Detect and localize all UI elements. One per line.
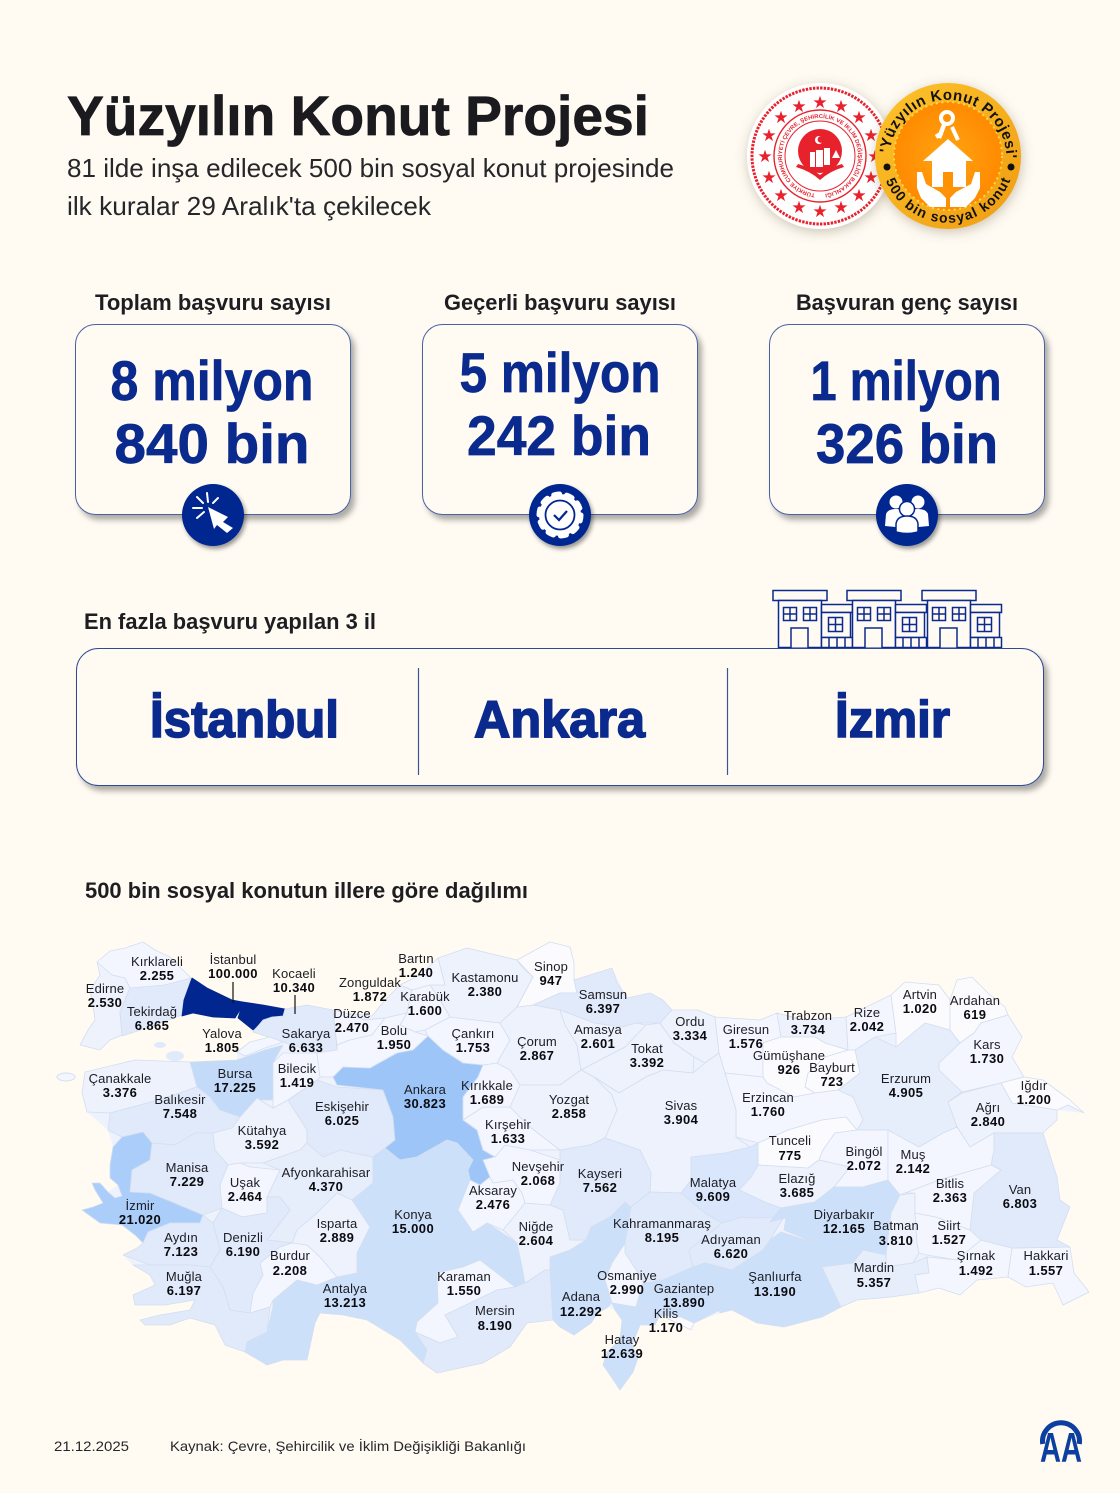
label: Diyarbakır: Diyarbakır [814,1207,874,1222]
label: Iğdır: Iğdır [1021,1078,1047,1093]
label: Amasya: Amasya [574,1022,622,1037]
label: Osmaniye: Osmaniye [597,1268,657,1283]
label: Antalya: 13.213 [324,1295,366,1310]
label: Diyarbakır: 12.165 [823,1221,865,1236]
label: Bitlis: 2.363 [933,1190,967,1205]
label: Kütahya: Kütahya [238,1123,286,1138]
province: Istanbul: İstanbul [150,691,339,749]
label: Kastamonu: 2.380 [468,984,502,999]
value: 1 milyon [810,349,1002,412]
label: Isparta: Isparta [317,1216,357,1231]
value [460,341,660,467]
label: Tokat: Tokat [631,1041,663,1056]
label: Bilecik: Bilecik [278,1061,316,1076]
label: Muş: 2.142 [896,1161,930,1176]
label: Kütahya: 3.592 [245,1137,279,1152]
label: Hatay: Hatay [605,1332,639,1347]
label: Bingöl: Bingöl [845,1144,883,1159]
icon: ministry seal: ★ [773,186,789,205]
label: Denizli: 6.190 [226,1244,260,1259]
label: Aydın: 7.123 [164,1244,198,1259]
label: Çorum: Çorum [517,1034,557,1049]
heading: Başvuran genç sayısı [796,290,1018,315]
label: Gümüşhane: Gümüşhane [753,1048,825,1063]
label: Osmaniye: 2.990 [610,1282,644,1297]
label: Kırklareli: Kırklareli [131,954,183,969]
label: Malatya: Malatya [690,1175,736,1190]
label: Siirt: 1.527 [932,1232,966,1247]
label: Mersin: 8.190 [478,1318,512,1333]
label: Şanlıurfa: Şanlıurfa [748,1269,802,1284]
footer date: 21.12.2025 [54,1438,129,1454]
label: Gaziantep: Gaziantep [654,1281,714,1296]
label: Artvin: Artvin [903,987,937,1002]
label: Edirne: Edirne [86,981,124,996]
panel: total applications [76,290,350,546]
province: Izmir: İzmir [835,691,950,749]
value: 8 milyon [110,349,314,412]
label: Adıyaman: 6.620 [714,1246,748,1261]
label: Batman: 3.810 [879,1233,913,1248]
label: Bolu: Bolu [381,1023,407,1038]
label: Ordu: Ordu [675,1014,705,1029]
label: Niğde: 2.604 [519,1233,554,1248]
label: Mardin: 5.357 [857,1275,891,1290]
label: Erzincan: Erzincan [742,1090,794,1105]
label: Iğdır: 1.200 [1017,1092,1051,1107]
label: Uşak: 2.464 [228,1189,263,1204]
label: Bayburt: 723 [821,1074,843,1089]
value [110,349,314,475]
label: Bilecik: 1.419 [280,1075,314,1090]
heading: map: 500 bin sosyal konutun illere göre dağılımı [85,878,528,903]
label: Van: Van [1009,1182,1031,1197]
label: Manisa: Manisa [166,1160,208,1175]
label: Ankara: 30.823 [404,1096,446,1111]
label: Kırklareli: 2.255 [140,968,174,983]
label: Aydın: Aydın [164,1230,198,1245]
label: Yalova: 1.805 [205,1040,239,1055]
subtitle: 81 ilde inşa edilecek 500 bin sosyal konut projesinde [67,153,674,183]
label: Uşak: Uşak [230,1175,260,1190]
icon: project badge [868,78,1030,240]
label: Karabük: Karabük [400,989,450,1004]
label: Ağrı: Ağrı [976,1100,1000,1115]
label: Karaman: Karaman [437,1269,491,1284]
label: Şırnak: Şırnak [957,1248,995,1263]
label: Erzurum: 4.905 [889,1085,923,1100]
label: Şanlıurfa: 13.190 [754,1284,796,1299]
icon: hands [917,172,980,207]
value: 242 bin [467,404,651,467]
label: Erzincan: 1.760 [751,1104,785,1119]
icon: ministry seal: ★ [867,147,883,166]
icon: key [936,112,958,140]
card [76,324,350,514]
label: Bingöl: 2.072 [847,1158,881,1173]
label: Batman: Batman [873,1218,919,1233]
label: Kayseri: Kayseri [578,1166,622,1181]
label: Şırnak: 1.492 [959,1263,993,1278]
title: Yüzyılın Konut Projesi [67,84,649,147]
label: Ardahan: 619 [964,1007,986,1022]
footer source: Kaynak: Çevre, Şehircilik ve İklim Değişikliği Bakanlığı [170,1437,526,1454]
label: Isparta: 2.889 [320,1230,354,1245]
icon: ministry seal: ★ [761,126,777,145]
label: Çanakkale: 3.376 [103,1085,137,1100]
icon: ministry seal: ★ [757,147,773,166]
label: Manisa: 7.229 [170,1174,204,1189]
map leader lines [233,982,295,1014]
label: Kırıkkale: Kırıkkale [461,1078,513,1093]
icon: ministry seal: ★ [791,198,807,217]
label: Afyonkarahisar: 4.370 [309,1179,343,1194]
label: Bursa: Bursa [218,1066,252,1081]
heading: top 3 provinces: En fazla başvuru yapılan 3 il [84,609,376,634]
label: Düzce: Düzce [333,1006,371,1021]
map labels [86,951,1069,1361]
label: Tekirdağ: Tekirdağ [127,1004,177,1019]
label: Eskişehir: 6.025 [325,1113,359,1128]
label: Ankara: Ankara [404,1082,446,1097]
label: Muş: Muş [900,1147,926,1162]
label: Giresun: 1.576 [729,1036,763,1051]
label: Gümüşhane: 926 [778,1062,800,1077]
label: Adıyaman: Adıyaman [701,1232,761,1247]
label: Sivas: Sivas [665,1098,697,1113]
icon: verified badge [529,484,591,546]
label: Siirt: Siirt [937,1218,961,1233]
label: Kastamonu: Kastamonu [451,970,519,985]
label: Samsun: Samsun [579,987,627,1002]
label: Sakarya: 6.633 [289,1040,323,1055]
label: Yozgat: Yozgat [549,1092,589,1107]
label: İstanbul: İstanbul [210,952,256,967]
label: Nevşehir: 2.068 [521,1173,555,1188]
label: İzmir: 21.020 [119,1212,161,1227]
label: Eskişehir: Eskişehir [315,1099,369,1114]
label: Antalya: Antalya [323,1281,367,1296]
label: Mersin: Mersin [475,1303,515,1318]
label: Muğla: 6.197 [167,1283,201,1298]
label: Hakkari: 1.557 [1029,1263,1063,1278]
label: Mardin: Mardin [854,1260,894,1275]
label: Zonguldak: 1.872 [353,989,387,1004]
label: Kayseri: 7.562 [583,1180,617,1195]
label: Kocaeli: Kocaeli [272,966,316,981]
icon: ministry seal: ★ [851,108,867,127]
icon: house [923,139,973,187]
panel: young applicants [770,290,1044,546]
label: Bolu: 1.950 [377,1037,411,1052]
icon: ministry seal: ★ [833,198,849,217]
value: 326 bin [816,412,998,475]
label: Bartın: 1.240 [399,965,433,980]
label: Bitlis: Bitlis [936,1176,964,1191]
label: Karabük: 1.600 [408,1003,442,1018]
label: Tekirdağ: 6.865 [135,1018,169,1033]
label: Kocaeli: 10.340 [273,980,315,995]
icon: ministry seal: ★ [812,93,828,112]
label: Amasya: 2.601 [581,1036,615,1051]
label: Çankırı: Çankırı [452,1026,494,1041]
label: Hatay: 12.639 [601,1346,643,1361]
icon: AA logo [1040,1423,1082,1471]
label: Rize: Rize [854,1005,880,1020]
label: Kilis: Kilis [654,1306,678,1321]
label: Kahramanmaraş: Kahramanmaraş [613,1216,711,1231]
label: Adana: Adana [562,1289,600,1304]
icon: ministry seal [740,78,890,240]
icon: project badge: 500 bin sosyal konut [886,177,1010,225]
label: Sinop: Sinop [534,959,568,974]
label: Yozgat: 2.858 [552,1106,586,1121]
label: Konya: Konya [394,1207,432,1222]
label: Sinop: 947 [540,973,562,988]
label: Afyonkarahisar: Afyonkarahisar [282,1165,370,1180]
label: Tunceli: 775 [779,1148,801,1163]
icon: buildings [773,590,1002,648]
label: Bayburt: Bayburt [809,1060,855,1075]
label: Niğde: Niğde [519,1219,553,1234]
value: 840 bin [114,412,310,475]
label: Kırıkkale: 1.689 [470,1092,504,1107]
map of provinces [57,942,1089,1390]
label: Erzurum: Erzurum [881,1071,931,1086]
label: Samsun: 6.397 [586,1001,620,1016]
label: Ağrı: 2.840 [971,1114,1005,1129]
label: Kilis: 1.170 [649,1320,683,1335]
label: Konya: 15.000 [392,1221,434,1236]
label: Giresun: Giresun [723,1022,769,1037]
value: 5 milyon [460,341,660,404]
label: Van: 6.803 [1003,1196,1037,1211]
heading: Toplam başvuru sayısı [95,290,331,315]
heading: Geçerli başvuru sayısı [444,290,676,315]
icon: people [876,484,938,546]
label: Ordu: 3.334 [673,1028,708,1043]
icon: project badge: 'Yüzyılın Konut Projesi' [880,90,1018,158]
label: Burdur: Burdur [270,1248,310,1263]
label: Tokat: 3.392 [630,1055,664,1070]
label: Kahramanmaraş: 8.195 [645,1230,679,1245]
card [422,324,698,514]
label: Sivas: 3.904 [664,1112,699,1127]
label: Bursa: 17.225 [214,1080,256,1095]
icon: ministry seal: ★ [863,168,879,187]
label: Nevşehir: Nevşehir [512,1159,564,1174]
label: Kars: Kars [973,1037,1001,1052]
label: Aksaray: Aksaray [469,1183,517,1198]
label: Sakarya: Sakarya [282,1026,330,1041]
label: Hakkari: Hakkari [1023,1248,1069,1263]
label: Burdur: 2.208 [273,1263,307,1278]
label: Artvin: 1.020 [903,1001,937,1016]
label: Rize: 2.042 [850,1019,884,1034]
label: Elazığ: 3.685 [780,1185,814,1200]
label: Çorum: 2.867 [520,1048,554,1063]
label: İzmir: İzmir [126,1198,154,1213]
label: Zonguldak: Zonguldak [339,975,401,990]
icon: ministry seal: ★ [773,108,789,127]
label: Çankırı: 1.753 [456,1040,490,1055]
label: Edirne: 2.530 [88,995,122,1010]
province: Ankara: Ankara [474,691,646,749]
label: Kars: 1.730 [970,1051,1004,1066]
label: Kırşehir: 1.633 [491,1131,525,1146]
label: Denizli: Denizli [223,1230,263,1245]
icon: ministry seal: ★ [812,202,828,221]
label: Gaziantep: 13.890 [663,1295,705,1310]
label: Yalova: Yalova [202,1026,242,1041]
label: Aksaray: 2.476 [476,1197,510,1212]
label: Balıkesir: Balıkesir [154,1092,206,1107]
label: Ardahan: Ardahan [950,993,1000,1008]
label: Elazığ: Elazığ [778,1171,816,1186]
subtitle: ilk kuralar 29 Aralık'ta çekilecek [67,191,432,221]
label: Düzce: 2.470 [335,1020,369,1035]
label: İstanbul: 100.000 [208,966,258,981]
icon: ministry seal: TÜRKİYE CUMHURİYETİ ÇEVRE, ŞEHİRCİLİK VE İKLİM DEĞİŞİKLİĞİ BAKANLIĞI [777,113,863,198]
label: Muğla: Muğla [166,1269,202,1284]
icon: ministry seal: ★ [791,97,807,116]
label: Çanakkale: Çanakkale [89,1071,151,1086]
label: Bartın: Bartın [398,951,434,966]
label: Karaman: 1.550 [447,1283,481,1298]
label: Balıkesir: 7.548 [163,1106,197,1121]
icon: ministry seal: ★ [863,126,879,145]
icon: AA logo: AA [1040,1424,1082,1471]
label: Trabzon: 3.734 [791,1022,826,1037]
value [810,349,1002,475]
card [770,324,1044,514]
subtitle [67,153,674,221]
label: Trabzon: Trabzon [784,1008,832,1023]
label: Tunceli: Tunceli [769,1133,811,1148]
icon: cursor [182,484,244,546]
panel: valid applications [422,290,698,546]
label: Kırşehir: Kırşehir [485,1117,531,1132]
icon: ministry seal: ★ [833,97,849,116]
icon: ministry seal: ★ [761,168,777,187]
label: Malatya: 9.609 [696,1189,730,1204]
icon: ministry seal: ★ [851,186,867,205]
label: Adana: 12.292 [560,1304,602,1319]
panel: top 3 provinces [76,648,1044,786]
